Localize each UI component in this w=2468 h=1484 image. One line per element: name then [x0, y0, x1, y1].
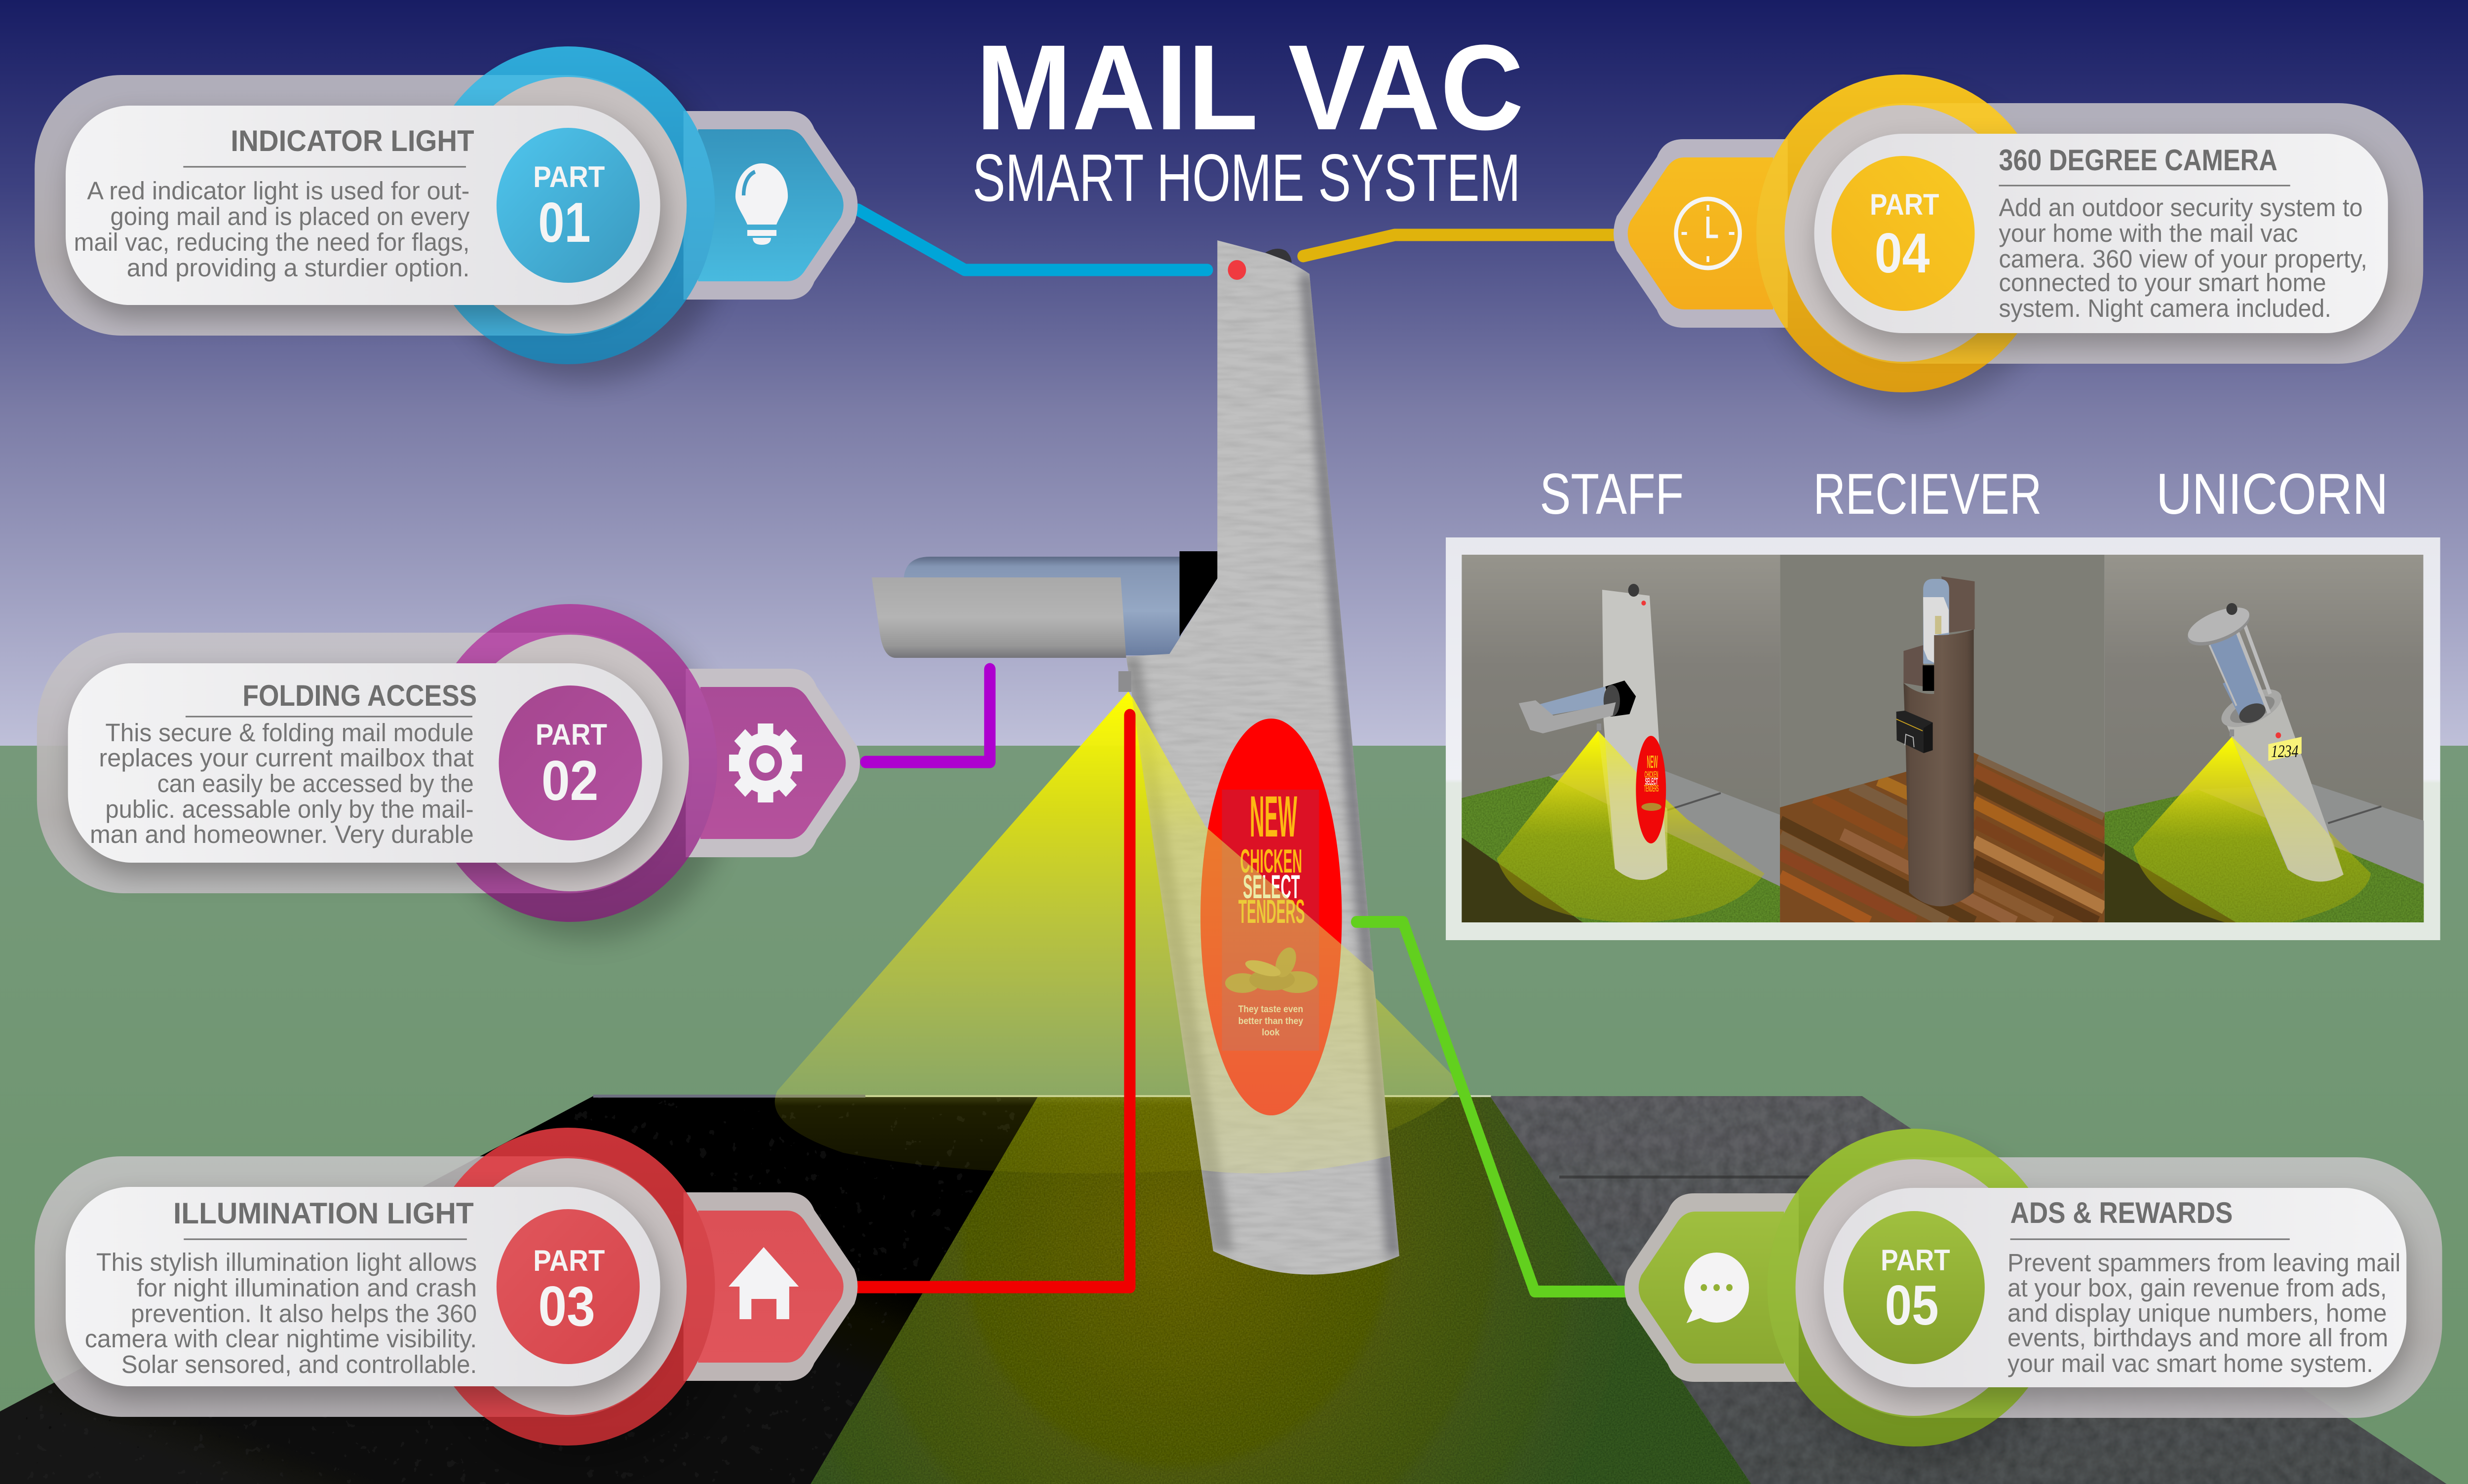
- body text: prevention. It also helps the 360: [131, 1300, 477, 1328]
- mailbox box: [1896, 711, 1933, 753]
- subtitle: SMART HOME SYSTEM: [972, 140, 1521, 215]
- render: unicorn: [2105, 555, 2424, 922]
- ad image: chicken: [1225, 944, 1317, 993]
- advertisement: TENDERS: [1238, 893, 1305, 930]
- part number: 01: [538, 191, 591, 254]
- part number: 02: [541, 750, 598, 812]
- body text: Solar sensored, and controllable.: [121, 1351, 477, 1378]
- body text: This stylish illumination light allows: [96, 1249, 477, 1276]
- body text: system. Night camera included.: [1999, 295, 2331, 322]
- part number: [533, 161, 605, 254]
- body text: mail vac, reducing the need for flags,: [74, 228, 469, 256]
- part number: 03: [538, 1275, 595, 1338]
- heading: FOLDING ACCESS: [242, 680, 477, 713]
- part number: [536, 719, 607, 812]
- body text: [85, 1249, 477, 1378]
- background: ground: [0, 746, 2468, 1484]
- body text: and display unique numbers, home: [2007, 1299, 2387, 1327]
- part number: PART: [536, 719, 607, 752]
- render: staff: [1462, 555, 1780, 922]
- render: unicorn: 1234: [2271, 742, 2298, 761]
- part number: PART: [533, 161, 605, 194]
- part number: PART: [533, 1245, 605, 1278]
- icon: light bulb: [735, 163, 788, 245]
- mail vac pole illustration: [872, 240, 1402, 1275]
- light cone: [775, 691, 1460, 1173]
- part number: [1870, 189, 1939, 285]
- connector: camera: [1303, 235, 1632, 256]
- heading: ILLUMINATION LIGHT: [173, 1197, 474, 1230]
- render: staff: SELECT: [1645, 776, 1658, 787]
- icon: gear: [729, 723, 802, 802]
- body text: [1999, 194, 2367, 322]
- body text: Prevent spammers from leaving mail: [2007, 1249, 2400, 1277]
- connector: illumination: [857, 715, 1130, 1287]
- body text: replaces your current mailbox that: [99, 744, 474, 772]
- body text: your mail vac smart home system.: [2007, 1350, 2373, 1377]
- panel: part 04 360 degree camera: [1614, 75, 2436, 410]
- body text: camera. 360 view of your property,: [1999, 245, 2367, 273]
- heading: 360 DEGREE CAMERA: [1999, 144, 2277, 177]
- body text: your home with the mail vac: [1999, 220, 2298, 247]
- body text: for night illumination and crash: [137, 1274, 477, 1302]
- light cone overlay on pole: [1129, 691, 1413, 1173]
- body text: and providing a sturdier option.: [127, 254, 469, 282]
- render: staff: NEW: [1647, 753, 1658, 772]
- body text: connected to your smart home: [1999, 269, 2326, 297]
- connector: indicator light: [858, 210, 1207, 270]
- advertisement: better than they: [1238, 1015, 1304, 1026]
- title: MAIL VAC: [976, 20, 1524, 155]
- body text: can easily be accessed by the: [157, 770, 474, 798]
- body text: A red indicator light is used for out-: [87, 177, 469, 205]
- panel: model renders: [1446, 537, 2440, 940]
- advertisement: CHICKEN: [1240, 842, 1302, 880]
- heading: ADS & REWARDS: [2010, 1197, 2233, 1230]
- icon: clock: [1676, 199, 1740, 268]
- model labels: UNICORN: [2156, 461, 2388, 526]
- render: staff: CHICKEN: [1645, 769, 1658, 780]
- body text: Add an outdoor security system to: [1999, 194, 2363, 222]
- panel: part 01 indicator light: [35, 46, 857, 381]
- render: receiver: [1780, 555, 2105, 922]
- body text: at your box, gain revenue from ads,: [2007, 1274, 2387, 1302]
- pole body: [1126, 240, 1399, 1275]
- body text: camera with clear nightime visibility.: [85, 1325, 477, 1353]
- part number: [533, 1245, 605, 1338]
- advertisement: [1200, 719, 1342, 1115]
- model labels: STAFF: [1540, 461, 1684, 526]
- heading: INDICATOR LIGHT: [231, 125, 474, 158]
- advertisement: look: [1262, 1027, 1280, 1037]
- body text: public. acessable only by the mail-: [105, 796, 474, 823]
- connector: ads: [1356, 922, 1634, 1292]
- tube: [1923, 579, 1949, 664]
- model labels: [1540, 461, 2388, 526]
- folded arm: [872, 577, 1126, 658]
- black hinge: [1180, 551, 1218, 637]
- part number: 05: [1885, 1274, 1939, 1337]
- folded tube: [904, 557, 1181, 655]
- title: [972, 20, 1524, 215]
- body text: events, birthdays and more all from: [2007, 1324, 2388, 1352]
- part number: PART: [1870, 189, 1939, 222]
- panel: part 05 ads and rewards: [1624, 1129, 2447, 1464]
- background: sky: [0, 0, 2468, 746]
- render: staff: TENDERS: [1644, 783, 1658, 794]
- back pillars: [1941, 576, 1975, 633]
- part number: PART: [1881, 1244, 1950, 1277]
- indicator light: [1228, 260, 1246, 280]
- body text: [2007, 1249, 2400, 1377]
- advertisement: SELECT: [1243, 868, 1300, 906]
- panel: part 03 illumination light: [35, 1128, 857, 1463]
- body text: This secure & folding mail module: [105, 719, 474, 747]
- connector: folding access: [866, 669, 990, 762]
- light nub: [1118, 671, 1131, 692]
- staff ad text: [1644, 753, 1658, 794]
- body text: [90, 719, 474, 848]
- icon: speech bubble: [1684, 1253, 1749, 1323]
- camera: [1265, 249, 1292, 263]
- part number: 04: [1875, 222, 1930, 285]
- model labels: RECIEVER: [1813, 461, 2042, 526]
- icon: house: [729, 1247, 799, 1319]
- part number: [1881, 1244, 1950, 1337]
- panel: part 02 folding access: [37, 604, 860, 939]
- advertisement: They taste even: [1238, 1003, 1303, 1014]
- body text: going mail and is placed on every: [111, 203, 470, 230]
- body text: [74, 177, 470, 282]
- advertisement: NEW: [1250, 784, 1297, 849]
- body text: man and homeowner. Very durable: [90, 821, 474, 848]
